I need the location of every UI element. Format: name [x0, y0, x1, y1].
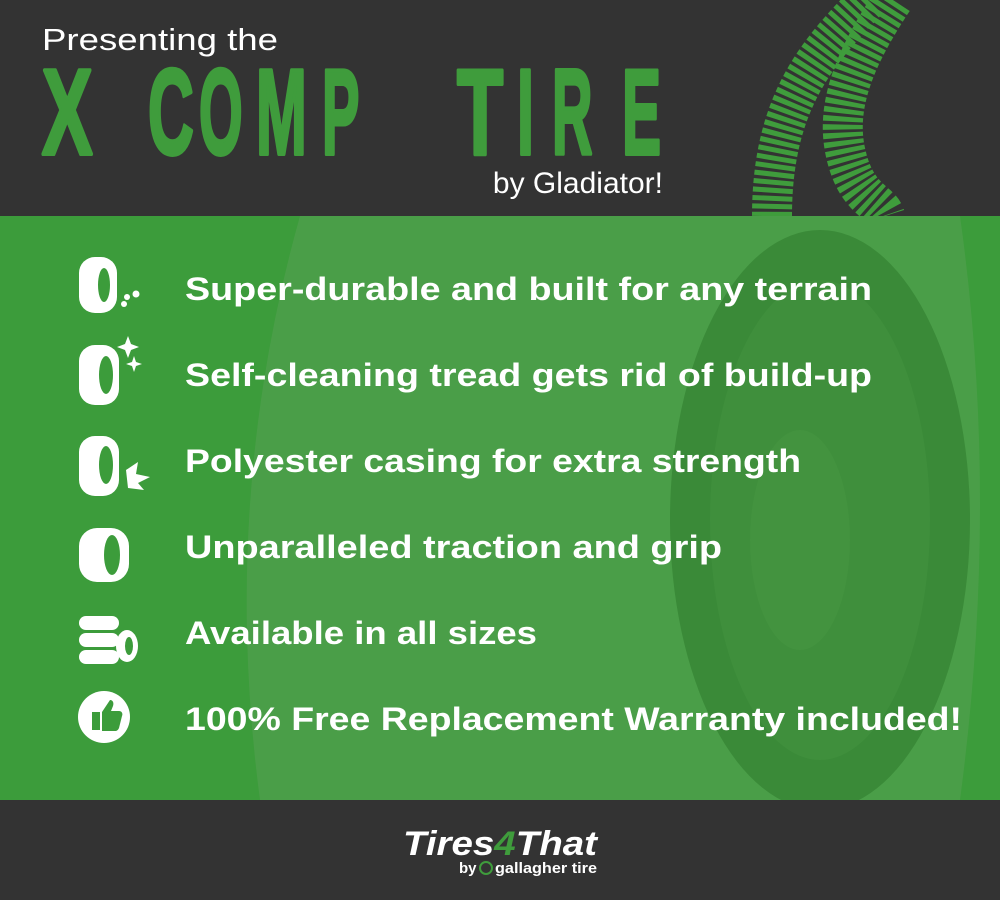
logo: Tires4That: by — [459, 860, 477, 877]
icon: stacked tires — [79, 616, 138, 664]
feature list: 100% Free Replacement Warranty included! — [185, 701, 962, 737]
icon: tire with sparkles — [79, 336, 142, 405]
feature list: Polyester casing for extra strength — [185, 443, 801, 479]
feature list: Available in all sizes — [185, 615, 537, 651]
title: X COMP TIRE: I — [517, 45, 534, 181]
subtitle: by Gladiator: by Gladiator! — [493, 167, 663, 200]
title: X COMP TIRE: R — [552, 45, 593, 181]
footer band — [0, 800, 1000, 900]
logo: Tires4That — [403, 825, 599, 877]
title: X COMP TIRE: T — [457, 43, 503, 180]
tire tracks — [772, 0, 893, 216]
title: X COMP TIRE: O — [199, 45, 243, 181]
title: presenting the: Presenting the — [42, 22, 278, 57]
feature list: Unparalleled traction and grip — [185, 529, 722, 565]
background tire image — [247, 216, 980, 810]
feature list — [185, 271, 962, 737]
icon: tire with drops — [79, 257, 140, 313]
title: X COMP TIRE: P — [322, 45, 359, 181]
logo: Tires4That: gallagher tire — [495, 860, 597, 877]
icon: tire with puncture — [79, 436, 150, 496]
feature list: Self-cleaning tread gets rid of build-up — [185, 357, 872, 393]
title: X COMP TIRE: M — [256, 45, 307, 181]
panel: green features — [0, 216, 1000, 810]
feature list: Super-durable and built for any terrain — [185, 271, 872, 307]
title: X COMP TIRE — [42, 43, 661, 181]
icon: thumbs up badge — [78, 691, 130, 743]
title: X COMP TIRE: C — [148, 44, 194, 180]
icon: tread tire — [79, 528, 129, 582]
header band — [0, 0, 1000, 216]
title: X COMP TIRE: E — [622, 44, 661, 181]
title: X COMP TIRE: X — [42, 43, 92, 180]
logo: Tires4That: Tires 4That — [403, 825, 599, 863]
